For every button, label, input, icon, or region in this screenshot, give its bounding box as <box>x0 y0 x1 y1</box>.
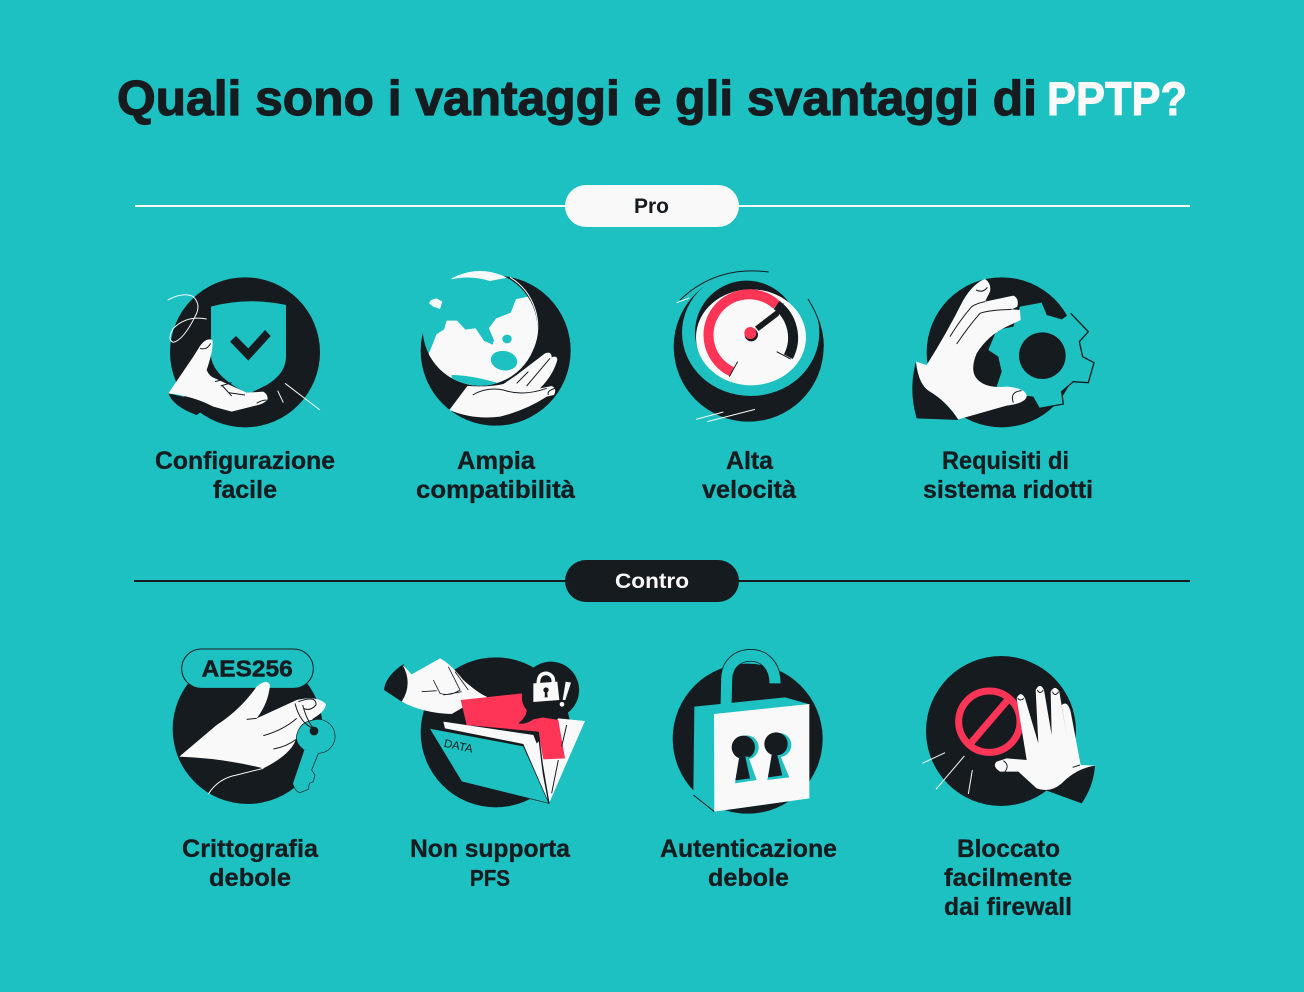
heading: Contro <box>565 560 739 602</box>
heading: Pro <box>565 185 739 227</box>
label: Crittografia debole: debole <box>209 864 291 892</box>
label: Configurazione facile <box>155 447 335 504</box>
label: Bloccato facilmente dai firewall: facilmente <box>944 864 1072 892</box>
label: Non supporta PFS: Non supporta <box>410 835 571 863</box>
label: Ampia compatibilità: Ampia <box>457 447 536 475</box>
icon: folder with data and lock bubble <box>384 657 585 807</box>
label: Requisiti di sistema ridotti <box>923 447 1093 504</box>
label: Ampia compatibilità: compatibilità <box>416 476 575 504</box>
label: Non supporta PFS: PFS <box>470 865 510 891</box>
title: PPTP? <box>1047 72 1187 125</box>
label: Ampia compatibilità <box>416 447 575 504</box>
label: Configurazione facile: facile <box>213 476 277 504</box>
icon: AES256 hand with key <box>173 649 335 804</box>
label: Non supporta PFS <box>410 835 571 891</box>
label: Requisiti di sistema ridotti: Requisiti di <box>942 447 1069 475</box>
label: Alta velocità: Alta <box>726 447 774 475</box>
title: Quali sono i vantaggi e gli svantaggi di <box>117 72 1037 126</box>
label: Configurazione facile: Configurazione <box>155 447 335 475</box>
icon: speedometer <box>674 269 824 422</box>
label: Bloccato facilmente dai firewall: dai firewall <box>944 893 1072 921</box>
label: Crittografia debole: Crittografia <box>182 835 319 863</box>
icon: blocked hand with prohibition sign <box>922 656 1095 806</box>
heading: Contro: Contro <box>615 570 689 593</box>
label: Alta velocità: velocità <box>702 476 796 504</box>
icon: hand holding gear <box>912 277 1094 427</box>
label: Crittografia debole <box>182 835 319 892</box>
label: Requisiti di sistema ridotti: sistema ridotti <box>923 476 1093 504</box>
label: Autenticazione debole <box>660 835 837 892</box>
icon: hand holding globe <box>421 260 571 426</box>
label: Autenticazione debole: Autenticazione <box>660 835 837 863</box>
icon: hand holding shield <box>168 277 320 427</box>
heading: Pro: Pro <box>634 195 669 218</box>
icon: padlock with two keyholes <box>673 655 823 814</box>
label: Bloccato facilmente dai firewall <box>944 835 1072 921</box>
icon: folder with data and lock bubble: DATA <box>443 738 474 756</box>
label: Alta velocità <box>702 447 796 504</box>
label: Bloccato facilmente dai firewall: Bloccato <box>957 835 1060 863</box>
icon: AES256 hand with key: AES256 <box>202 656 293 682</box>
label: Autenticazione debole: debole <box>708 864 789 892</box>
